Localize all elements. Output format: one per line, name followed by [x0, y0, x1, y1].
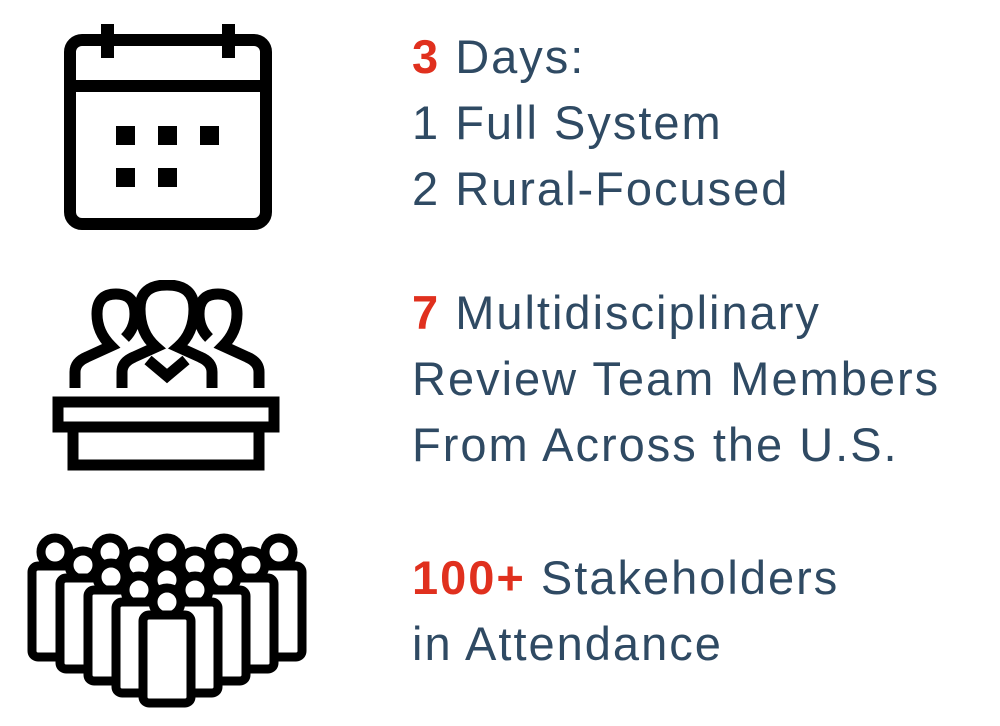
icon: calendar	[64, 24, 272, 230]
text: days: 2 Rural-Focused	[412, 162, 789, 215]
icon: crowd of stakeholders	[28, 534, 306, 708]
text: days: 3 Days:	[412, 30, 585, 83]
text: days	[412, 30, 789, 215]
text: stakeholders: 100+ Stakeholders	[412, 551, 839, 604]
text: stakeholders	[412, 551, 839, 670]
text: stakeholders: in Attendance	[412, 617, 723, 670]
text: days: 1 Full System	[412, 96, 723, 149]
text: team members	[412, 286, 940, 471]
icon: review team at podium	[52, 280, 280, 470]
text: team members: 7 Multidisciplinary	[412, 286, 821, 339]
text: team members: From Across the U.S.	[412, 418, 899, 471]
text: team members: Review Team Members	[412, 352, 940, 405]
